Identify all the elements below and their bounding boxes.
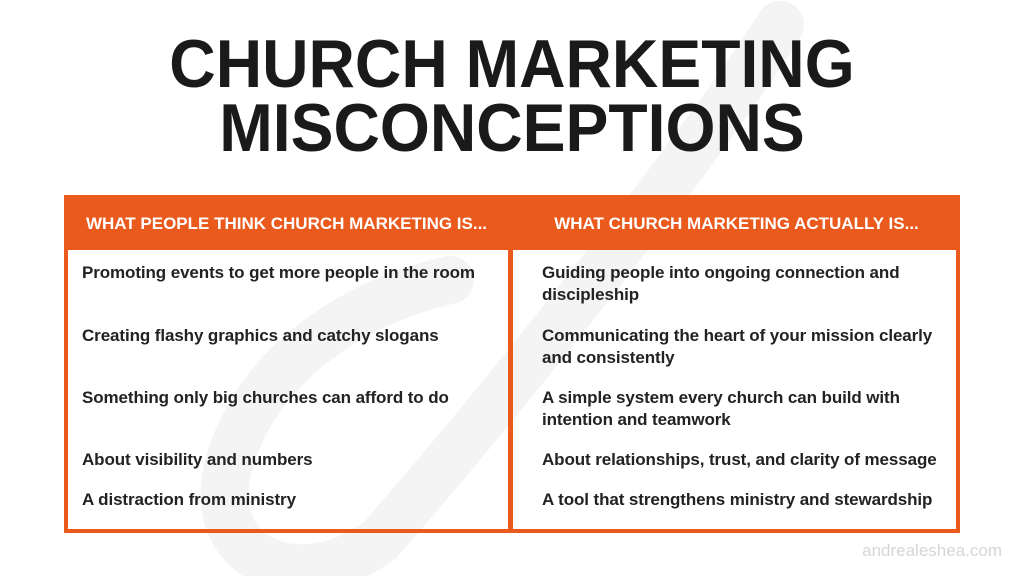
- left column items: [82, 263, 475, 509]
- column divider: [508, 195, 513, 533]
- right column items: intention and teamwork: [542, 410, 731, 429]
- left column items: Creating flashy graphics and catchy slogans: [82, 326, 439, 345]
- header: left: WHAT PEOPLE THINK CHURCH MARKETING IS...: [86, 214, 487, 233]
- right column items: and consistently: [542, 348, 675, 367]
- header: right: [513, 195, 960, 250]
- left column items: Something only big churches can afford to do: [82, 388, 449, 407]
- left column items: A distraction from ministry: [82, 490, 296, 509]
- left column items: Promoting events to get more people in the room: [82, 263, 475, 282]
- right column items: About relationships, trust, and clarity of message: [542, 450, 937, 469]
- table: [64, 195, 960, 533]
- right column items: Guiding people into ongoing connection and: [542, 263, 899, 282]
- right column items: A tool that strengthens ministry and stewardship: [542, 490, 932, 509]
- left column items: About visibility and numbers: [82, 450, 313, 469]
- right column items: A simple system every church can build with: [542, 388, 900, 407]
- header: right: WHAT CHURCH MARKETING ACTUALLY IS...: [554, 214, 919, 233]
- title: CHURCH MARKETING: [169, 26, 855, 102]
- header: left: [64, 195, 509, 250]
- title: [169, 26, 855, 166]
- right column items: discipleship: [542, 285, 639, 304]
- right column items: Communicating the heart of your mission clearly: [542, 326, 932, 345]
- right column items: [542, 263, 937, 509]
- footer credit: andrealeshea.com: [862, 541, 1002, 560]
- title: MISCONCEPTIONS: [219, 90, 805, 166]
